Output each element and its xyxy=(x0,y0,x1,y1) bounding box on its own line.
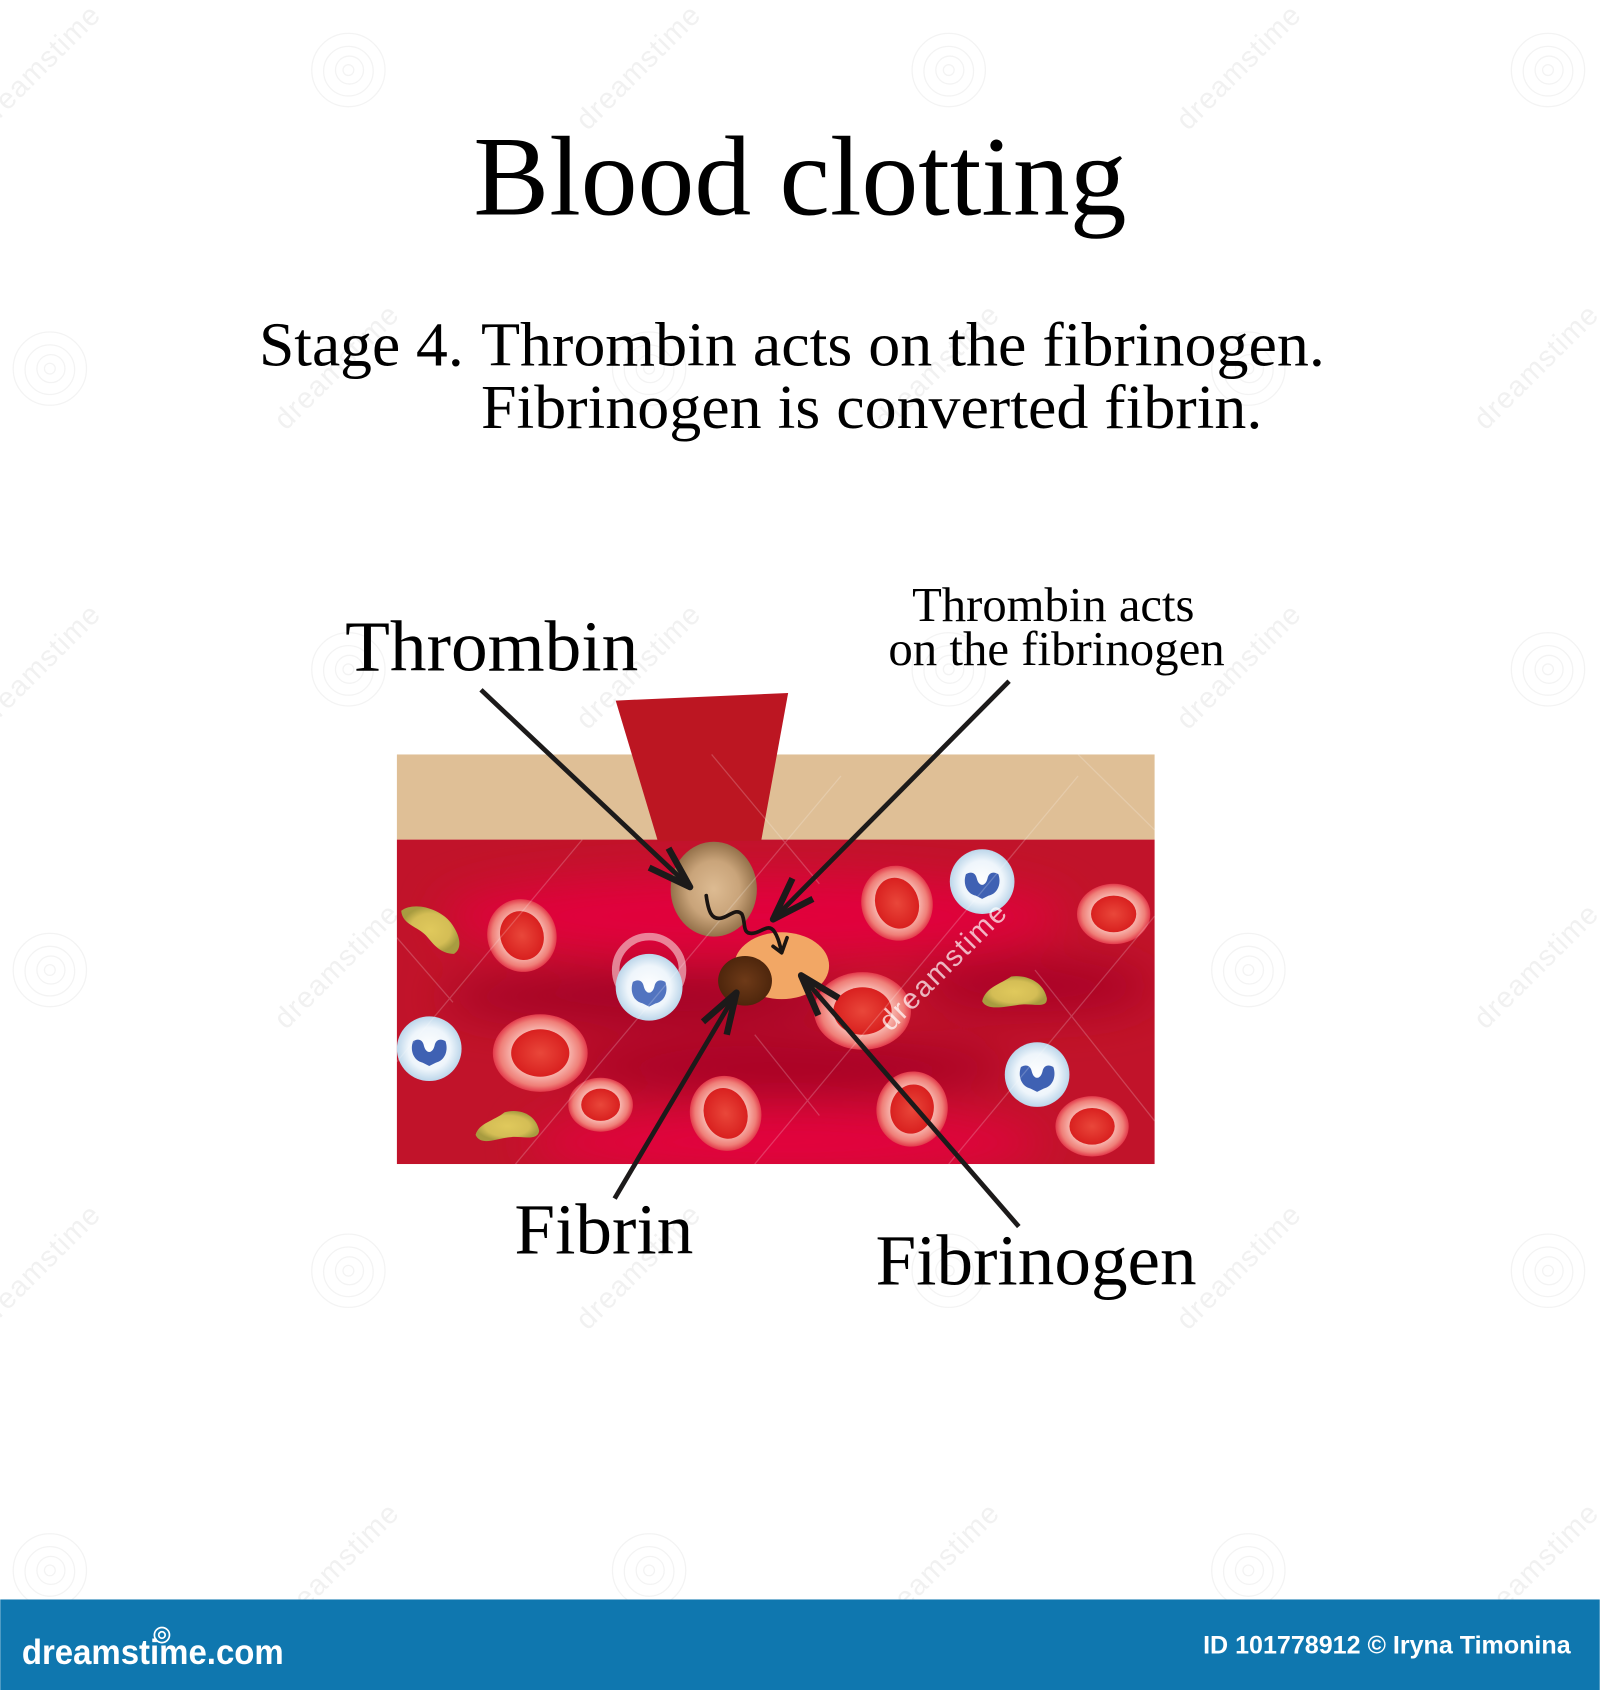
subtitle: stage description: Stage 4. xyxy=(259,309,464,379)
white watermark on vessel xyxy=(397,754,1155,1164)
watermark pattern: dreamstime xyxy=(268,898,406,1035)
blood vessel xyxy=(397,840,1155,1173)
footer bar xyxy=(0,1599,1600,1690)
squiggle: thrombin acting on fibrinogen xyxy=(706,896,787,953)
wound wedge xyxy=(616,693,788,841)
watermark pattern: dreamstime xyxy=(570,1198,708,1336)
white blood cells xyxy=(397,849,1069,1107)
arrow: thrombin acts on fibrinogen xyxy=(773,681,1009,919)
subtitle: stage description xyxy=(259,309,1325,442)
arrow: fibrin xyxy=(615,993,736,1199)
thrombin cell xyxy=(671,842,757,937)
skin layer xyxy=(397,754,1155,840)
title: Blood clotting xyxy=(473,114,1127,239)
label: Thrombin acts on the fibrinogen: on the fibrinogen xyxy=(888,623,1225,676)
red blood cells xyxy=(477,856,1150,1161)
fibrinogen cell xyxy=(734,932,829,999)
footer credit: ID 101778912 © Iryna Timonina xyxy=(1203,1632,1571,1659)
label: Thrombin: Thrombin xyxy=(345,606,638,686)
platelets xyxy=(401,906,1047,1141)
watermark pattern: dreamstime xyxy=(1170,1198,1308,1336)
white watermark on vessel: dreamstime xyxy=(873,896,1014,1037)
label: Fibrinogen: Fibrinogen xyxy=(875,1221,1197,1301)
ghost ring behind white cell xyxy=(616,937,683,1003)
label: Thrombin acts on the fibrinogen: Thrombin acts xyxy=(912,579,1194,632)
fibrin cell xyxy=(718,956,772,1006)
label: Thrombin acts on the fibrinogen xyxy=(888,579,1225,676)
watermark pattern: dreamstime xyxy=(570,598,708,736)
watermark pattern: dreamstime xyxy=(1170,0,1308,136)
watermark pattern: dreamstime xyxy=(869,298,1006,436)
subtitle: stage description: Fibrinogen is converted fibrin. xyxy=(481,372,1262,442)
diagram: blood vessel cross-section xyxy=(397,681,1155,1227)
watermark pattern: dreamstime xyxy=(869,1497,1006,1635)
watermark pattern: dreamstime xyxy=(268,298,406,436)
arrow: thrombin xyxy=(481,690,690,887)
watermark pattern: dreamstime xyxy=(570,0,708,136)
watermark pattern: dreamstime xyxy=(1170,598,1308,736)
subtitle: stage description: Thrombin acts on the fibrinogen. xyxy=(481,309,1325,379)
label: Fibrin: Fibrin xyxy=(514,1189,693,1269)
footer logo: dreamstime.com: dreamstime.com xyxy=(22,1632,284,1672)
watermark pattern: dreamstime xyxy=(268,1497,406,1635)
arrow: fibrinogen xyxy=(801,975,1019,1227)
